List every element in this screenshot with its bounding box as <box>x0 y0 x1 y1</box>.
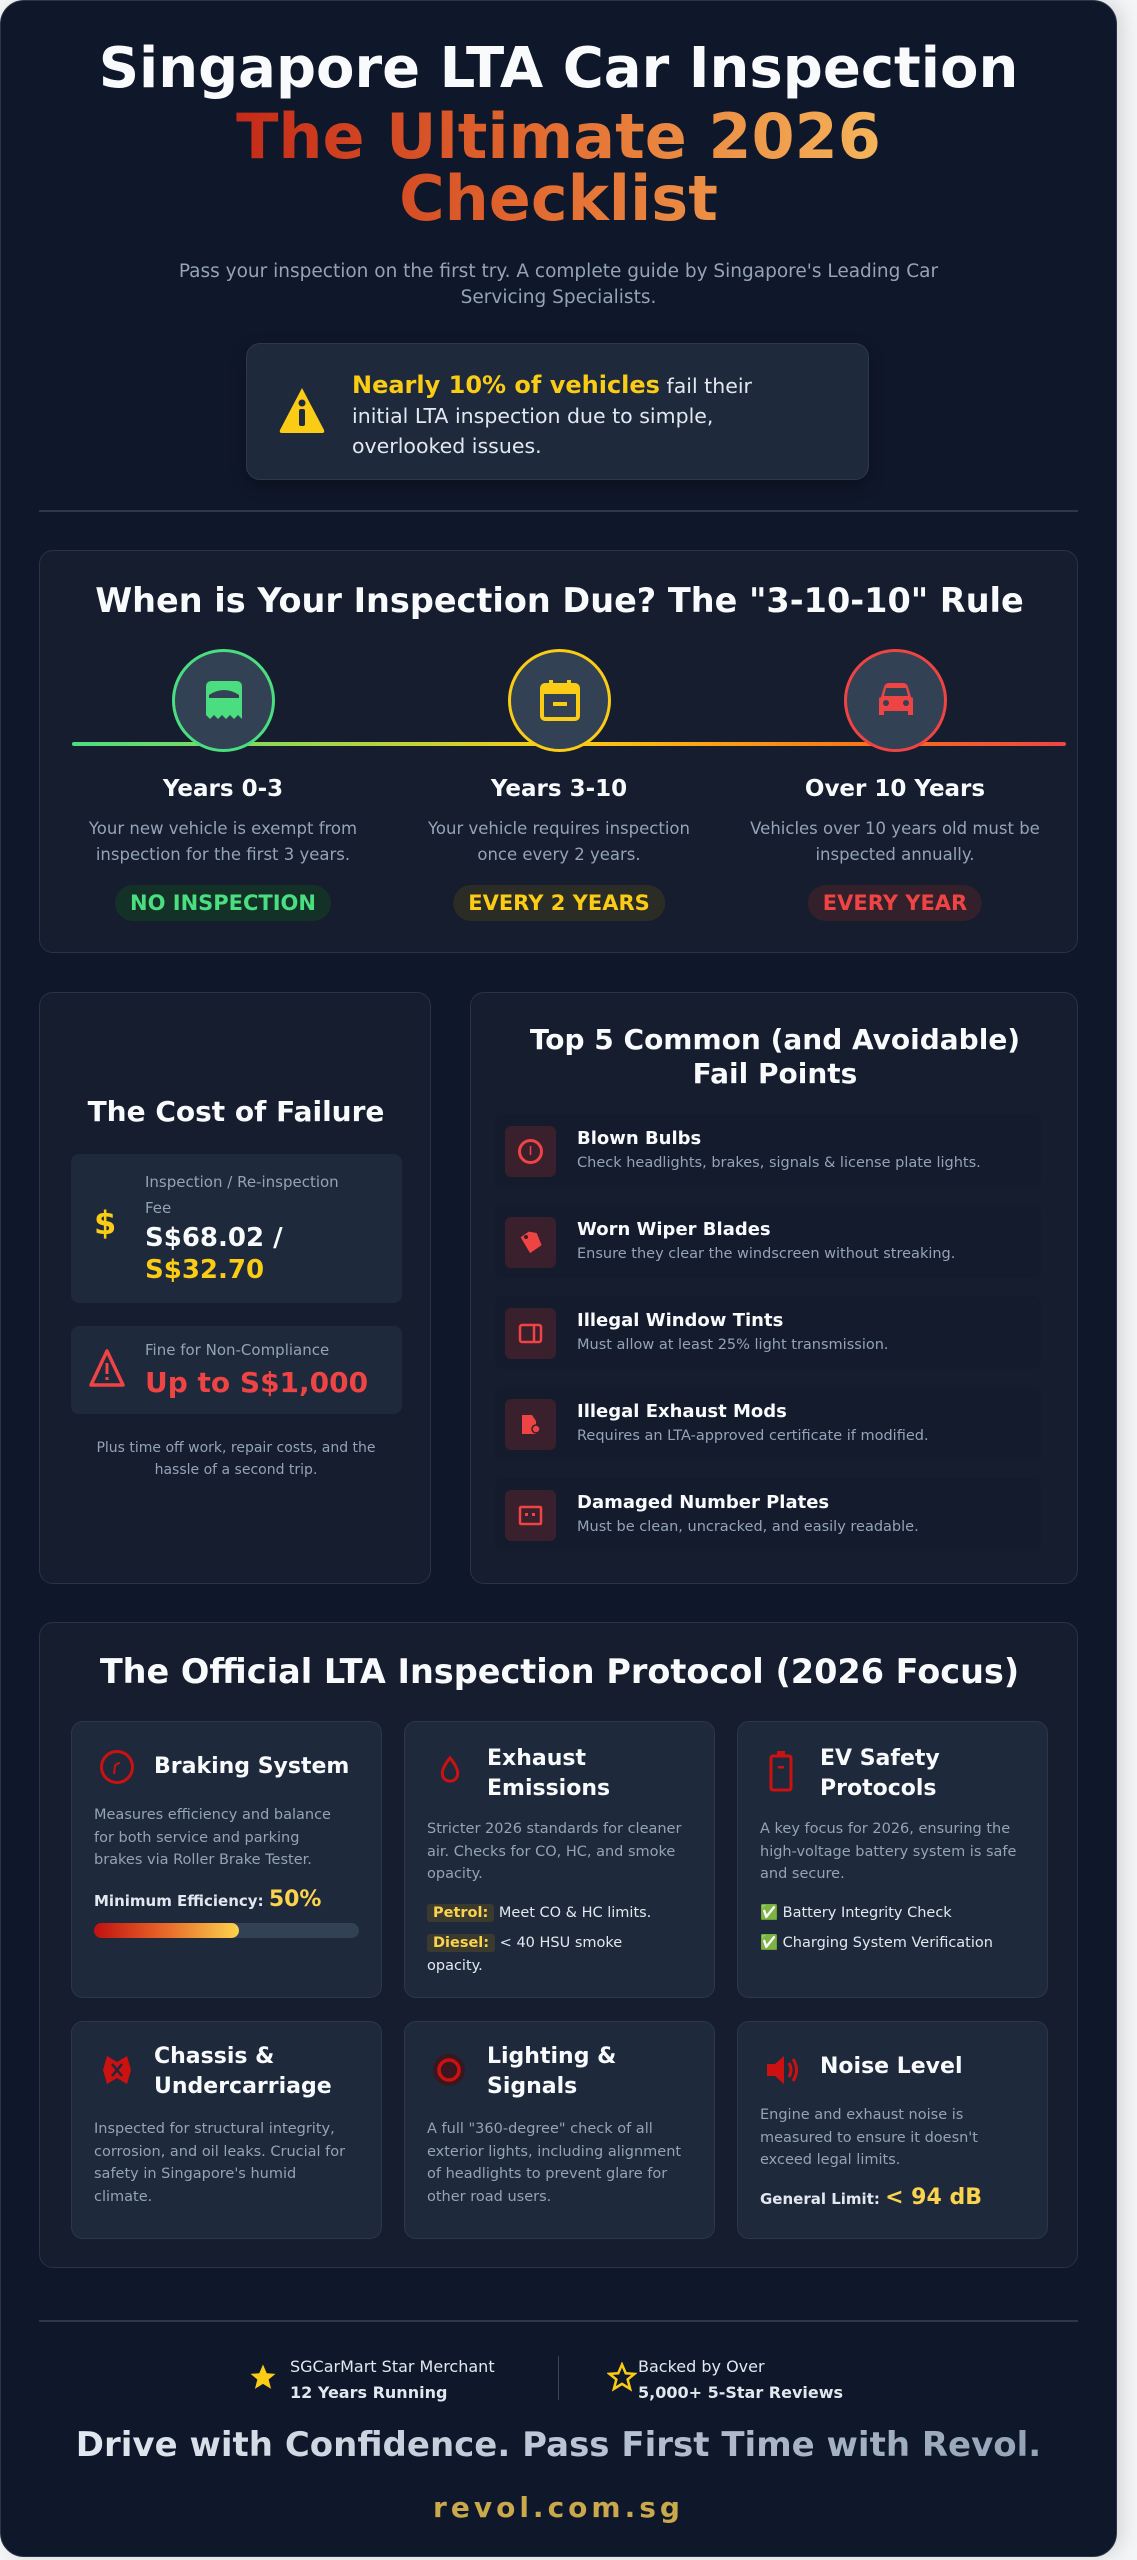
card: noise level: exceed legal limits. <box>760 2152 900 2168</box>
item: blown bulbs: Check headlights, brakes, signals & license plate lights. <box>577 1155 981 1171</box>
item: wiper blades: Ensure they clear the windscreen without streaking. <box>577 1246 955 1262</box>
stage 2 text: Years 3-10 <box>491 776 627 802</box>
website: revol.com.sg <box>433 2491 684 2524</box>
card: noise level: General Limit: < 94 dB <box>760 2185 982 2210</box>
card: lighting: Lighting & <box>487 2044 616 2069</box>
card: lighting: A full "360-degree" check of all <box>427 2121 653 2137</box>
badge: every 2 years <box>453 885 665 921</box>
icon: light <box>433 2054 465 2086</box>
badge: every year: EVERY YEAR <box>823 891 967 915</box>
icon: dollar: $ <box>94 1204 116 1242</box>
footnote <box>96 1440 376 1478</box>
timeline line <box>72 742 1066 746</box>
panel: top 5 fail points <box>470 992 1078 1584</box>
item: number plates: Damaged Number Plates <box>577 1492 829 1513</box>
card: exhaust emissions: opacity. <box>427 1958 483 1974</box>
item: exhaust mods: Requires an LTA-approved certificate if modified. <box>577 1428 929 1444</box>
fee box: Inspection / Re-inspection <box>145 1173 339 1191</box>
callout text: initial LTA inspection due to simple, <box>352 404 713 428</box>
card: exhaust emissions: Stricter 2026 standards for cleaner <box>427 1821 681 1837</box>
item: blown bulbs <box>495 1114 1041 1187</box>
card: braking system <box>71 1721 382 1998</box>
card: exhaust emissions <box>404 1721 715 1998</box>
card: chassis: safety in Singapore's humid <box>94 2166 296 2182</box>
footnote: Plus time off work, repair costs, and the <box>96 1440 376 1456</box>
stage 3 text: Over 10 Years <box>805 776 985 802</box>
card: EV safety: EV Safety <box>820 1746 940 1771</box>
trust badges: 5,000+ 5-Star Reviews <box>638 2383 843 2402</box>
card: exhaust emissions: Diesel: < 40 HSU smoke <box>433 1935 622 1951</box>
progress bar <box>94 1923 359 1938</box>
item: window tints: Must allow at least 25% light transmission. <box>577 1337 889 1353</box>
panel: 3-10-10 rule timeline <box>39 550 1078 953</box>
fine box: Up to S$1,000 <box>145 1366 368 1399</box>
title: Singapore LTA Car Inspection <box>99 36 1018 101</box>
stage 2 text: once every 2 years. <box>477 845 641 864</box>
card: exhaust emissions: air. Checks for CO, HC, and smoke <box>427 1844 675 1860</box>
card: EV safety: Protocols <box>820 1776 937 1801</box>
item: exhaust mods <box>495 1387 1041 1460</box>
stage 3 text <box>750 776 1040 864</box>
heading: Fail Points <box>693 1057 857 1090</box>
icon: warning <box>280 388 324 433</box>
intro text <box>179 261 938 308</box>
panel: cost of failure <box>39 992 431 1584</box>
card: chassis: Inspected for structural integrity, <box>94 2121 335 2137</box>
icon: battery <box>770 1751 792 1792</box>
panel: official inspection protocol <box>39 1622 1078 2268</box>
card: chassis <box>71 2021 382 2239</box>
trust badges: Backed by Over <box>638 2357 765 2376</box>
intro text: Servicing Specialists. <box>461 287 656 308</box>
card: lighting <box>404 2021 715 2239</box>
item: window tints <box>495 1296 1041 1369</box>
card: noise level: Engine and exhaust noise is <box>760 2107 963 2123</box>
badge: no inspection <box>115 885 331 921</box>
item: number plates: Must be clean, uncracked, and easily readable. <box>577 1519 919 1535</box>
stage 3 text: Vehicles over 10 years old must be <box>750 819 1040 838</box>
card: EV safety: and secure. <box>760 1866 845 1882</box>
card: chassis: Undercarriage <box>154 2074 332 2099</box>
card: lighting: Signals <box>487 2074 577 2099</box>
icon: chassis <box>103 2056 131 2084</box>
closing tagline: Drive with Confidence. Pass First Time with Revol. <box>76 2425 1041 2465</box>
card: exhaust emissions: opacity. <box>427 1866 483 1882</box>
card: braking system: Measures efficiency and balance <box>94 1807 331 1823</box>
card: exhaust emissions: Exhaust <box>487 1746 586 1771</box>
footnote: hassle of a second trip. <box>155 1462 317 1478</box>
heading: Top 5 Common (and Avoidable) <box>530 1023 1020 1056</box>
card: exhaust emissions: Petrol: Meet CO & HC limits. <box>433 1905 651 1921</box>
fee box: S$32.70 <box>145 1255 264 1285</box>
callout text: overlooked issues. <box>352 434 542 458</box>
icon: gauge <box>100 1750 134 1784</box>
card: EV safety <box>737 1721 1048 1998</box>
fee box <box>71 1154 402 1303</box>
card: EV safety: ✅ Battery Integrity Check <box>760 1905 952 1921</box>
item: blown bulbs: Blown Bulbs <box>577 1128 701 1149</box>
card: noise level: Noise Level <box>820 2054 962 2079</box>
subtitle heading gradient: Checklist <box>399 162 718 235</box>
fine box: Fine for Non-Compliance <box>145 1341 329 1359</box>
icon: warning triangle <box>89 1349 125 1387</box>
card: lighting: of headlights to prevent glare for <box>427 2166 667 2182</box>
card: braking system: for both service and parking <box>94 1830 299 1846</box>
item: wiper blades: Worn Wiper Blades <box>577 1219 771 1240</box>
icon: star filled <box>250 2364 276 2389</box>
subtitle heading gradient <box>236 100 881 235</box>
icon: car (red) <box>844 649 947 752</box>
heading: When is Your Inspection Due? The "3-10-10" Rule <box>95 581 1024 620</box>
heading: The Cost of Failure <box>88 1095 384 1128</box>
fee box: S$68.02 / <box>145 1223 283 1253</box>
callout: fail statistic <box>246 343 869 480</box>
card: chassis: climate. <box>94 2188 152 2204</box>
stage 1 text: inspection for the first 3 years. <box>96 845 350 864</box>
stage 3 text: inspected annually. <box>815 845 975 864</box>
card: braking system: Braking System <box>154 1754 349 1779</box>
intro text: Pass your inspection on the first try. A complete guide by Singapore's Leading Car <box>179 261 938 282</box>
icon: new car (green) <box>172 649 275 752</box>
card: chassis: corrosion, and oil leaks. Crucial for <box>94 2144 345 2160</box>
card: lighting: exterior lights, including alignment <box>427 2144 681 2160</box>
card: noise level: measured to ensure it doesn't <box>760 2130 978 2146</box>
stage 1 text: Years 0-3 <box>163 776 283 802</box>
badge: every year <box>808 885 982 921</box>
trust badges: SGCarMart Star Merchant <box>290 2357 495 2376</box>
item: exhaust mods: Illegal Exhaust Mods <box>577 1401 787 1422</box>
callout text <box>352 371 752 458</box>
card: chassis: Chassis & <box>154 2044 274 2069</box>
card: EV safety: high-voltage battery system is safe <box>760 1844 1016 1860</box>
icon: star outline <box>607 2362 637 2392</box>
stage 2 text <box>428 776 690 864</box>
card: lighting: other road users. <box>427 2188 551 2204</box>
card: exhaust emissions: Emissions <box>487 1776 610 1801</box>
trust badges <box>250 2356 843 2402</box>
badge: no inspection: NO INSPECTION <box>130 891 316 915</box>
card: noise level <box>737 2021 1048 2239</box>
fine box <box>71 1326 402 1414</box>
callout text: Nearly 10% of vehicles fail their <box>352 371 752 399</box>
card: braking system: Minimum Efficiency: 50% <box>94 1887 321 1912</box>
fee box: Fee <box>145 1199 171 1217</box>
card: EV safety: A key focus for 2026, ensuring the <box>760 1821 1010 1837</box>
icon: speaker <box>767 2056 798 2084</box>
heading: The Official LTA Inspection Protocol (2026 Focus) <box>100 1652 1019 1691</box>
icon: drop <box>440 1756 460 1783</box>
item: wiper blades <box>495 1205 1041 1278</box>
stage 1 text: Your new vehicle is exempt from <box>89 819 357 838</box>
badge: every 2 years: EVERY 2 YEARS <box>468 891 650 915</box>
trust badges: 12 Years Running <box>290 2383 447 2402</box>
item: window tints: Illegal Window Tints <box>577 1310 783 1331</box>
stage 1 text <box>88 776 357 864</box>
heading <box>530 1023 1020 1090</box>
card: braking system: brakes via Roller Brake Tester. <box>94 1852 312 1868</box>
subtitle heading gradient: The Ultimate 2026 <box>236 100 881 173</box>
item: number plates <box>495 1478 1041 1551</box>
stage 2 text: Your vehicle requires inspection <box>428 819 690 838</box>
card: EV safety: ✅ Charging System Verification <box>760 1935 993 1951</box>
icon: calendar (yellow) <box>508 649 611 752</box>
